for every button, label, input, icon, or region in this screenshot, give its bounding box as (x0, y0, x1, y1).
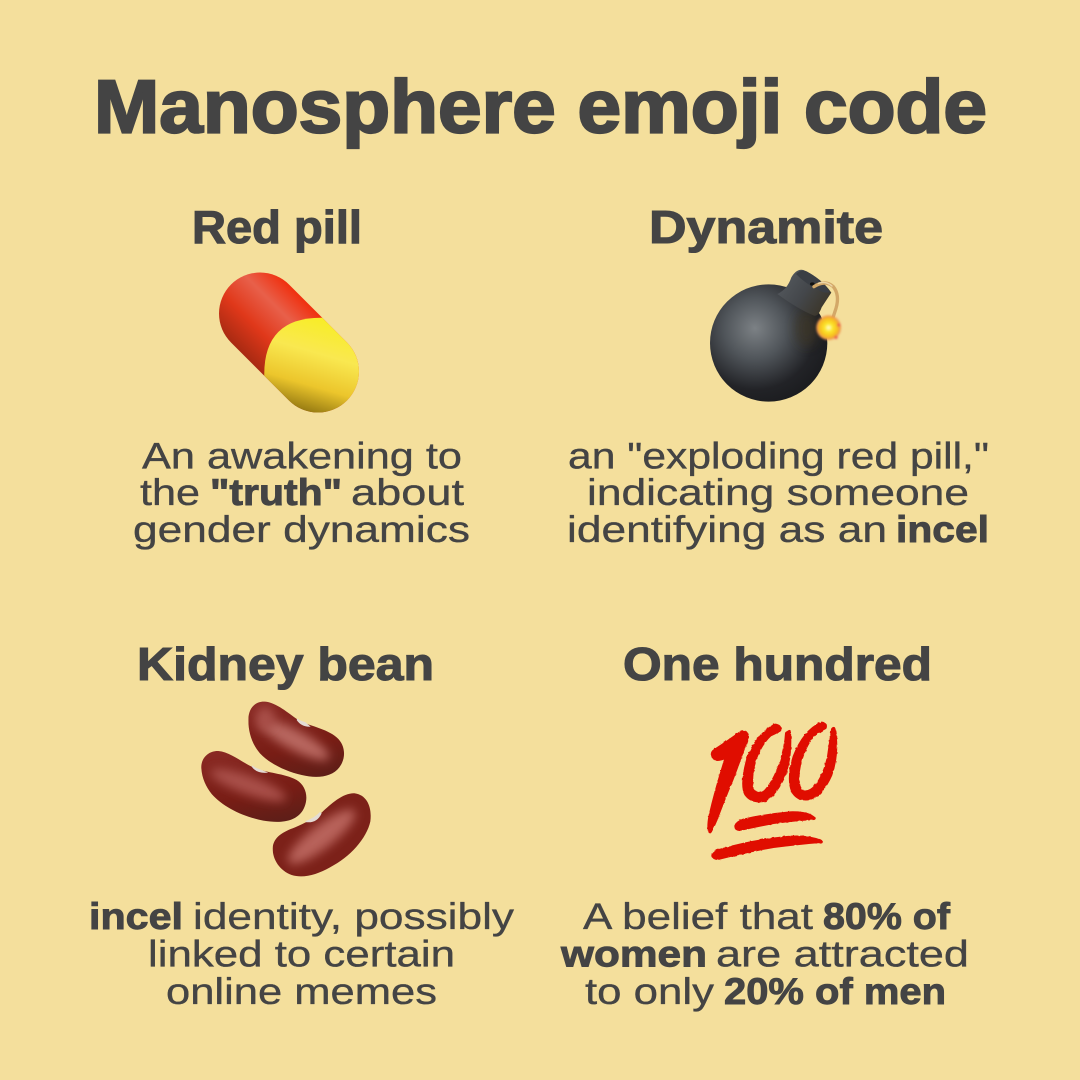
description: dynamite: indicating someone (587, 471, 969, 513)
icon: hundred points (709, 723, 836, 858)
icon: kidney beans (197, 697, 375, 882)
description: one hundred: to only (585, 970, 714, 1012)
description: kidney bean (89, 895, 514, 1012)
icon: bomb (710, 270, 841, 402)
panel: red pill (133, 201, 470, 550)
description: dynamite: incel (896, 508, 989, 550)
description: red pill: about (351, 471, 465, 513)
description: one hundred (560, 895, 969, 1012)
description: dynamite: an "exploding red pill," (568, 434, 989, 476)
description: one hundred: are attracted (716, 932, 969, 974)
description: red pill (133, 434, 470, 550)
heading: one hundred: One hundred (623, 638, 932, 690)
description: red pill: "truth" (210, 471, 342, 513)
description: red pill: gender dynamics (133, 508, 470, 550)
description: red pill: An awakening to (142, 434, 462, 476)
panel: dynamite (567, 201, 989, 550)
description: kidney bean: identity, possibly (193, 895, 514, 937)
description: dynamite: identifying as an (567, 508, 887, 550)
description: one hundred: A belief that (583, 895, 814, 937)
description: one hundred: 80% of (823, 895, 951, 937)
heading: kidney bean: Kidney bean (137, 638, 434, 690)
title: Manosphere emoji code (94, 64, 987, 148)
description: one hundred: women (560, 932, 707, 974)
heading: dynamite: Dynamite (649, 201, 883, 253)
heading: red pill: Red pill (192, 201, 362, 253)
description: kidney bean: incel (89, 895, 183, 937)
description: kidney bean: online memes (166, 970, 437, 1012)
panel: kidney bean (89, 638, 514, 1012)
description: kidney bean: linked to certain (148, 932, 455, 974)
description: red pill: the (140, 471, 200, 513)
description: one hundred: 20% of men (724, 970, 946, 1012)
panel: one hundred (560, 638, 969, 1012)
description: dynamite (567, 434, 989, 550)
icon: red and yellow pill (202, 256, 376, 429)
